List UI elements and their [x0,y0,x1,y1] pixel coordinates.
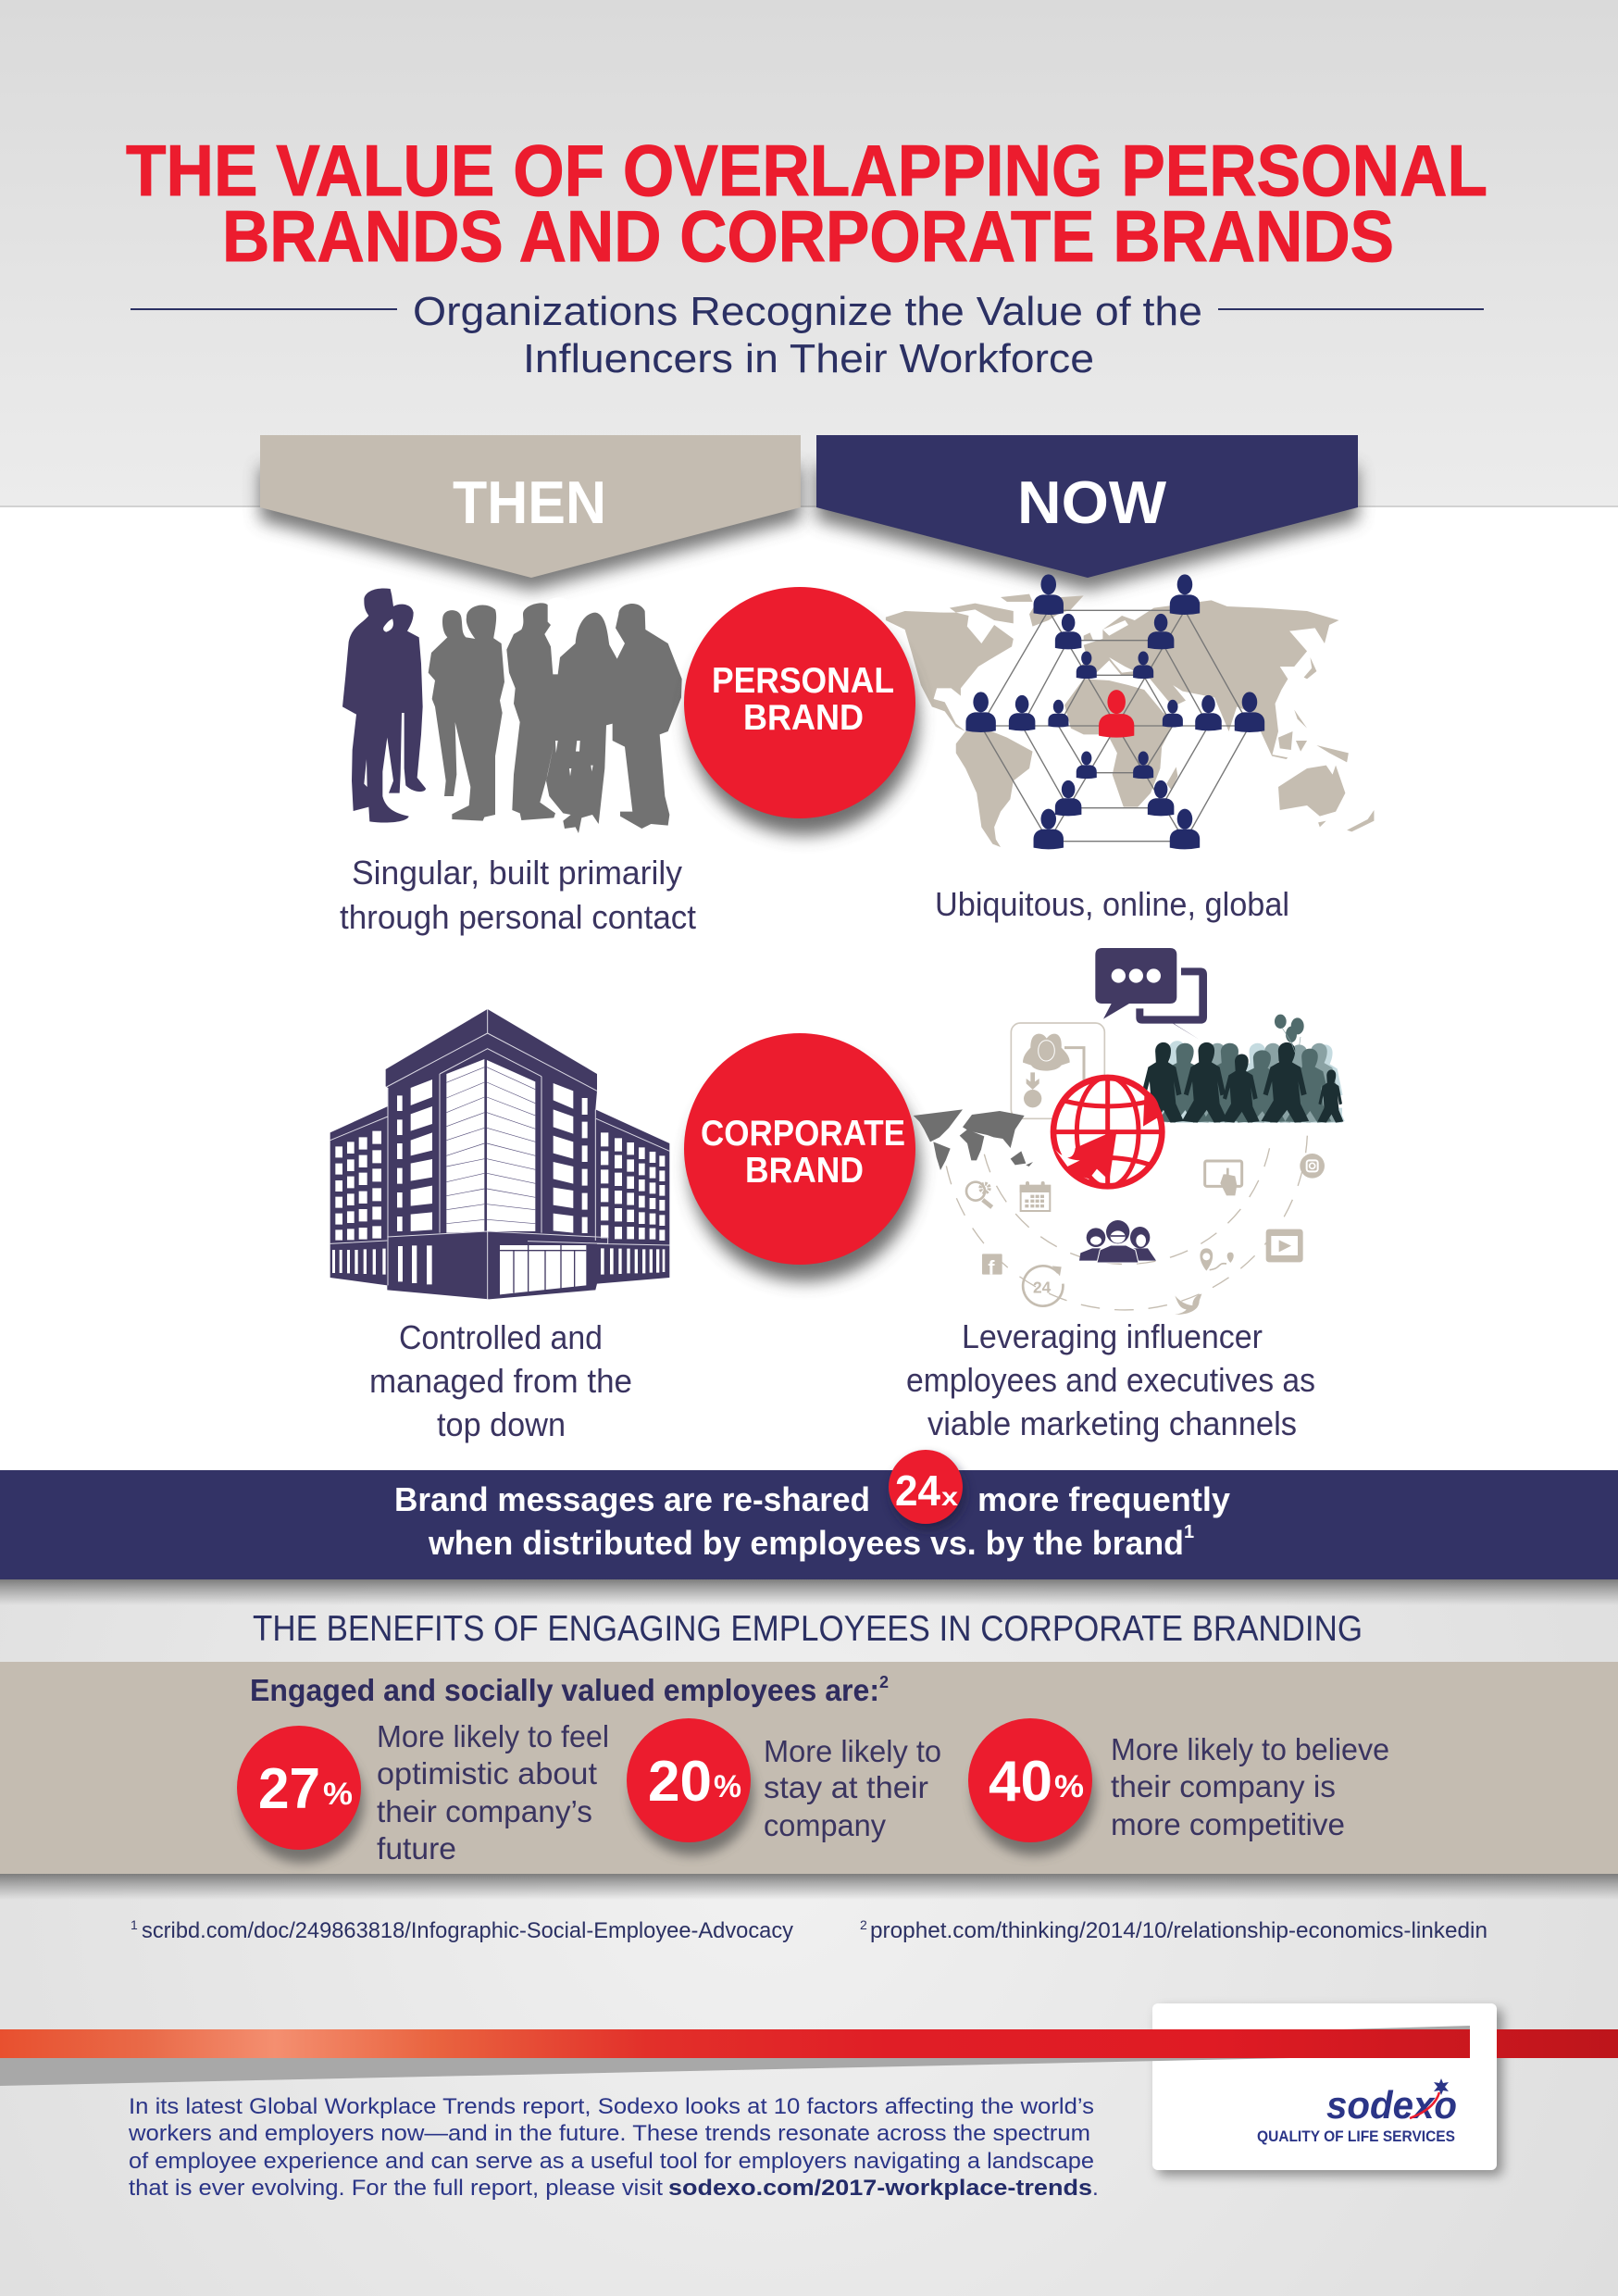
footnotes [131,1917,1487,1943]
closing paragraph: In its latest Global Workplace Trends report, Sodexo looks at 10 factors affecting the world’s [129,2094,1094,2119]
panel: benefits [0,1662,1618,1900]
stat text: 20%: company [764,1808,886,1842]
lower background [0,1579,1618,2296]
icon: map pins [1200,1248,1234,1271]
icon: 24 hour clock [1023,1266,1063,1306]
navy statistic band: more frequently [977,1480,1230,1518]
caption: now corporate [906,1317,1315,1442]
circle: personal brand [684,587,918,835]
logo card [1152,2003,1502,2176]
icon: small grey world map [914,1109,1033,1170]
logo: sodexo [1257,2078,1457,2145]
social marketing illustration [914,948,1345,1315]
navy statistic band [0,1450,1618,1605]
circle: corporate brand: CORPORATE [701,1114,905,1154]
icon: search gear [966,1182,992,1207]
icon: tablet [1205,1161,1242,1195]
stat: 27%: % [323,1777,353,1812]
stat: 27% [237,1726,364,1863]
caption: then personal: Singular, built primarily [352,854,682,892]
closing paragraph: . [1092,2176,1099,2201]
navy statistic band: Brand messages are re-shared [394,1480,870,1518]
people nodes [965,574,1264,849]
navy statistic band: x [941,1482,958,1511]
caption: then corporate: managed from the [369,1362,632,1400]
stat text: 27%: future [377,1831,456,1866]
footnotes: 1 [131,1917,138,1932]
navy statistic band: when distributed by employees vs. by the brand [428,1524,1184,1562]
stat text: 27%: More likely to feel [377,1719,609,1753]
map [886,594,1374,847]
stat: 20% [627,1718,753,1855]
stat: 40% [968,1718,1095,1855]
subtitle [131,289,1484,381]
title [126,130,1487,277]
caption: then corporate: top down [437,1405,566,1443]
icon: flow card [1011,1023,1104,1118]
top background band [0,0,1618,506]
dashed arcs [946,1136,1307,1310]
logo: sodexo: QUALITY OF LIFE SERVICES [1257,2128,1455,2145]
caption: now corporate: viable marketing channels [927,1404,1297,1442]
icon: 24 hour clock: 24 [1033,1279,1052,1297]
caption: now corporate: Leveraging influencer [962,1317,1263,1355]
closing paragraph: workers and employers now—and in the future. These trends resonate across the spectrum [128,2121,1090,2146]
stat text: 27% [377,1719,609,1866]
stat text: 27%: their company’s [377,1794,592,1828]
banner: NOW: NOW [1017,468,1167,536]
closing paragraph [128,2094,1099,2201]
caption: then personal [340,854,696,936]
stat: 27%: 27 [258,1757,320,1821]
icon: influencer team [1079,1220,1156,1263]
icon: red globe [1053,1077,1162,1188]
circle: personal brand: BRAND [743,698,864,738]
closing paragraph: of employee experience and can serve as a useful tool for employers navigating a landscape [129,2149,1094,2174]
caption: then corporate: Controlled and [399,1318,603,1356]
icon: calendar [1020,1181,1051,1211]
title: THE VALUE OF OVERLAPPING PERSONAL [126,130,1487,211]
icon: facebook [982,1254,1002,1279]
closing paragraph: sodexo.com/2017-workplace-trends [668,2176,1092,2201]
stat text: 40%: their company is [1111,1769,1336,1803]
navy statistic band: 1 [1184,1522,1194,1542]
circle: personal brand: PERSONAL [712,661,894,701]
stat text: 40%: more competitive [1111,1807,1345,1841]
stat: 20%: % [714,1769,741,1804]
closing paragraph: that is ever evolving. For the full report, please visit [129,2176,663,2201]
glass tower [446,1059,535,1233]
icon: facebook: f [988,1257,995,1279]
circle: corporate brand: BRAND [745,1151,864,1191]
network lines [981,610,1250,842]
red ribbon [0,2029,1618,2058]
footnotes: scribd.com/doc/249863818/Infographic-Social-Employee-Advocacy [142,1918,793,1943]
subtitle: Organizations Recognize the Value of the [413,289,1202,334]
caption: now personal: Ubiquitous, online, global [935,885,1289,923]
benefits intro: Engaged and socially valued employees are: [250,1673,879,1707]
caption: then personal: through personal contact [340,898,696,936]
banner: THEN [260,435,801,591]
stat text: 40% [1111,1732,1389,1841]
footnotes: 2 [860,1917,867,1932]
badge: 24x [889,1450,963,1524]
icon: film [1266,1229,1303,1262]
icon: twitter [1175,1294,1201,1315]
stat: 40%: 40 [989,1750,1052,1814]
stat text: 20% [764,1734,941,1842]
icon: crowd [1139,1015,1345,1123]
stat text: 40%: More likely to believe [1111,1732,1389,1766]
footnotes: prophet.com/thinking/2014/10/relationship-economics-linkedin [870,1918,1487,1943]
subtitle: Influencers in Their Workforce [523,336,1094,381]
title: BRANDS AND CORPORATE BRANDS [222,195,1394,277]
logo: sodexo: sodexo [1326,2083,1457,2127]
stat text: 20%: More likely to [764,1734,941,1768]
white content panel [0,506,1618,1470]
benefits intro: 2 [879,1673,889,1691]
caption: now corporate: employees and executives as [906,1361,1315,1399]
caption: then corporate [369,1318,632,1443]
benefits heading: THE BENEFITS OF ENGAGING EMPLOYEES IN CORPORATE BRANDING [253,1609,1363,1649]
banner: THEN: THEN [453,468,606,536]
icon: chat bubbles [1095,948,1207,1040]
stat: 20%: 20 [648,1750,712,1814]
navy statistic band: 24 [895,1466,940,1515]
circle: corporate brand [684,1033,919,1281]
stat text: 20%: stay at their [764,1770,928,1804]
windows [397,1079,588,1233]
stat text: 27%: optimistic about [377,1756,597,1791]
stat: 40%: % [1054,1769,1084,1804]
red ribbon shadow [0,2058,1290,2086]
icon: camera [1300,1154,1325,1179]
silhouettes: group of people [342,589,682,833]
building illustration [330,1009,669,1299]
banner: NOW [816,435,1358,591]
world map with people network [886,574,1374,849]
podium [332,1245,665,1294]
